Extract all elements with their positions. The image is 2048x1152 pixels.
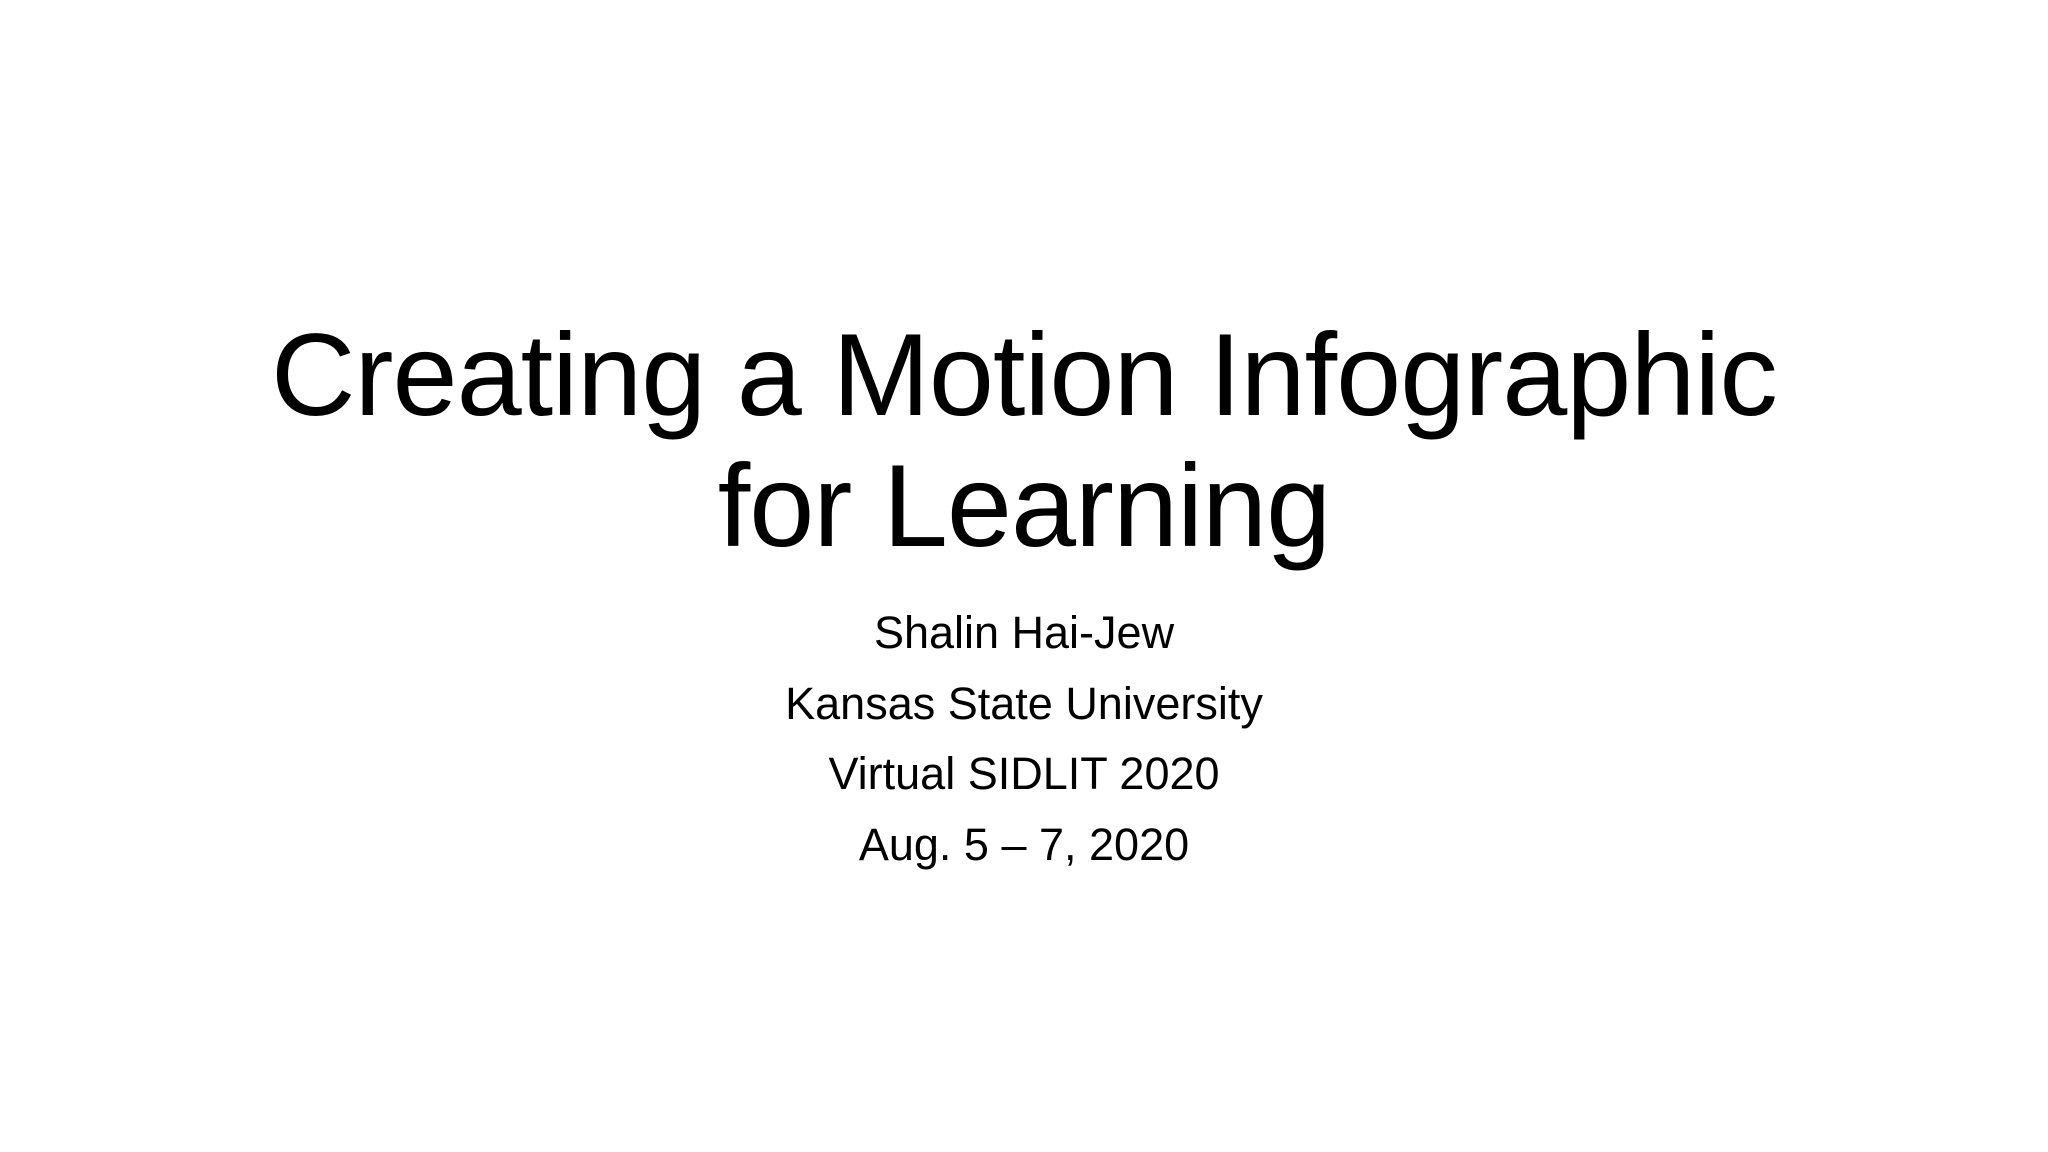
title: for Learning	[718, 440, 1330, 571]
title	[271, 309, 1777, 571]
subtitle: author and event details: Virtual SIDLIT 2020	[828, 748, 1220, 799]
subtitle: author and event details: Aug. 5 – 7, 2020	[859, 818, 1189, 870]
subtitle: author and event details: Kansas State University	[785, 678, 1263, 728]
subtitle: author and event details	[785, 607, 1263, 870]
subtitle: author and event details: Shalin Hai-Jew	[874, 607, 1174, 658]
title: Creating a Motion Infographic	[271, 309, 1777, 440]
